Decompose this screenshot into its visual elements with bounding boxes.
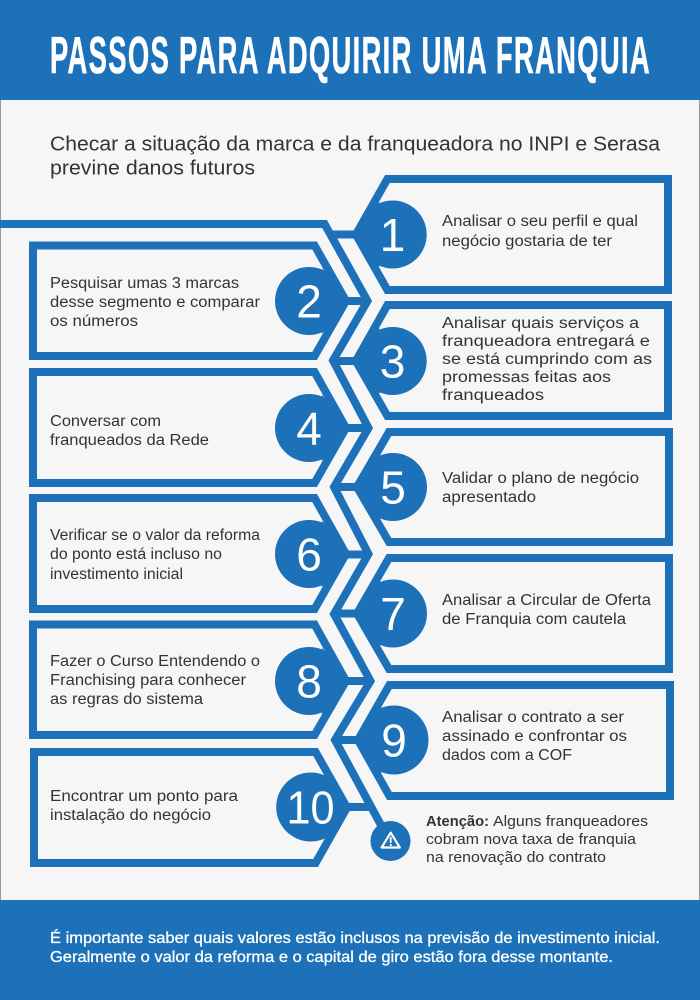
step 2 — [33, 246, 365, 356]
step 8: as regras do sistema — [50, 691, 203, 708]
step 8: 8 — [296, 656, 322, 708]
attention note: Alguns franqueadores — [493, 814, 648, 830]
intro text: previne danos futuros — [50, 158, 255, 180]
step 2: 2 — [296, 276, 322, 328]
attention note: Atenção: — [426, 814, 489, 830]
attention note: na renovação do contrato — [426, 850, 606, 866]
step 5: Validar o plano de negócio — [442, 470, 639, 487]
step 7: de Franquia com cautela — [442, 611, 626, 628]
step 1: 1 — [380, 209, 405, 261]
step 6 — [33, 498, 365, 609]
header band — [0, 0, 700, 100]
attention note: cobram nova taxa de franquia — [426, 832, 637, 848]
step 8: Fazer o Curso Entendendo o — [50, 653, 260, 670]
step 2: Pesquisar umas 3 marcas — [50, 275, 239, 292]
step 4: Conversar com — [50, 413, 161, 430]
step 2: desse segmento e comparar — [50, 294, 260, 311]
step 2: os números — [50, 313, 138, 330]
step 5: 5 — [380, 462, 406, 514]
step 5: apresentado — [442, 489, 536, 506]
step 10: 10 — [286, 782, 334, 834]
step 3: Analisar quais serviços a — [442, 315, 639, 332]
footer text: É importante saber quais valores estão inclusos na previsão de investimento inicial. — [50, 930, 660, 947]
step 6: Verificar se o valor da reforma — [50, 527, 260, 544]
step 3: se está cumprindo com as — [442, 351, 652, 368]
step 6: investimento inicial — [50, 566, 183, 583]
step 3: 3 — [380, 336, 405, 388]
step 7: Analisar a Circular de Oferta — [442, 592, 651, 609]
intro text — [50, 134, 661, 180]
footer text: Geralmente o valor da reforma e o capital de giro estão fora desse montante. — [50, 949, 613, 966]
step 4 — [33, 372, 365, 483]
step 9: Analisar o contrato a ser — [442, 709, 624, 726]
step 8 — [33, 624, 367, 735]
footer band — [0, 900, 700, 1000]
step 10: Encontrar um ponto para — [50, 788, 238, 805]
step 6: 6 — [296, 528, 322, 580]
step 1: negócio gostaria de ter — [442, 233, 612, 250]
footer text — [50, 930, 660, 966]
step 4: 4 — [296, 402, 322, 454]
intro text: Checar a situação da marca e da franqueadora no INPI e Serasa — [50, 134, 661, 156]
attention note — [426, 814, 648, 866]
step 7: 7 — [380, 588, 406, 640]
step 10 — [34, 752, 370, 863]
step 1 — [331, 179, 668, 290]
step 10: instalação do negócio — [50, 807, 211, 824]
connector spine — [0, 224, 388, 838]
step 3 — [334, 305, 668, 416]
step 9: dados com a COF — [442, 747, 572, 764]
icon: warning — [370, 821, 410, 861]
step 3: franqueados — [442, 387, 544, 404]
step 1: Analisar o seu perfil e qual — [442, 213, 638, 230]
step 9 — [336, 685, 670, 796]
step 3: franqueadora entregará e — [442, 333, 650, 350]
step 5 — [335, 432, 669, 542]
step 4: franqueados da Rede — [50, 432, 209, 449]
step 8: Franchising para conhecer — [50, 672, 246, 689]
step 6: do ponto está incluso no — [50, 546, 222, 563]
step 7 — [335, 558, 669, 669]
step 3: promessas feitas aos — [442, 369, 611, 386]
step 9: assinado e confrontar os — [442, 728, 627, 745]
step 9: 9 — [381, 714, 407, 766]
